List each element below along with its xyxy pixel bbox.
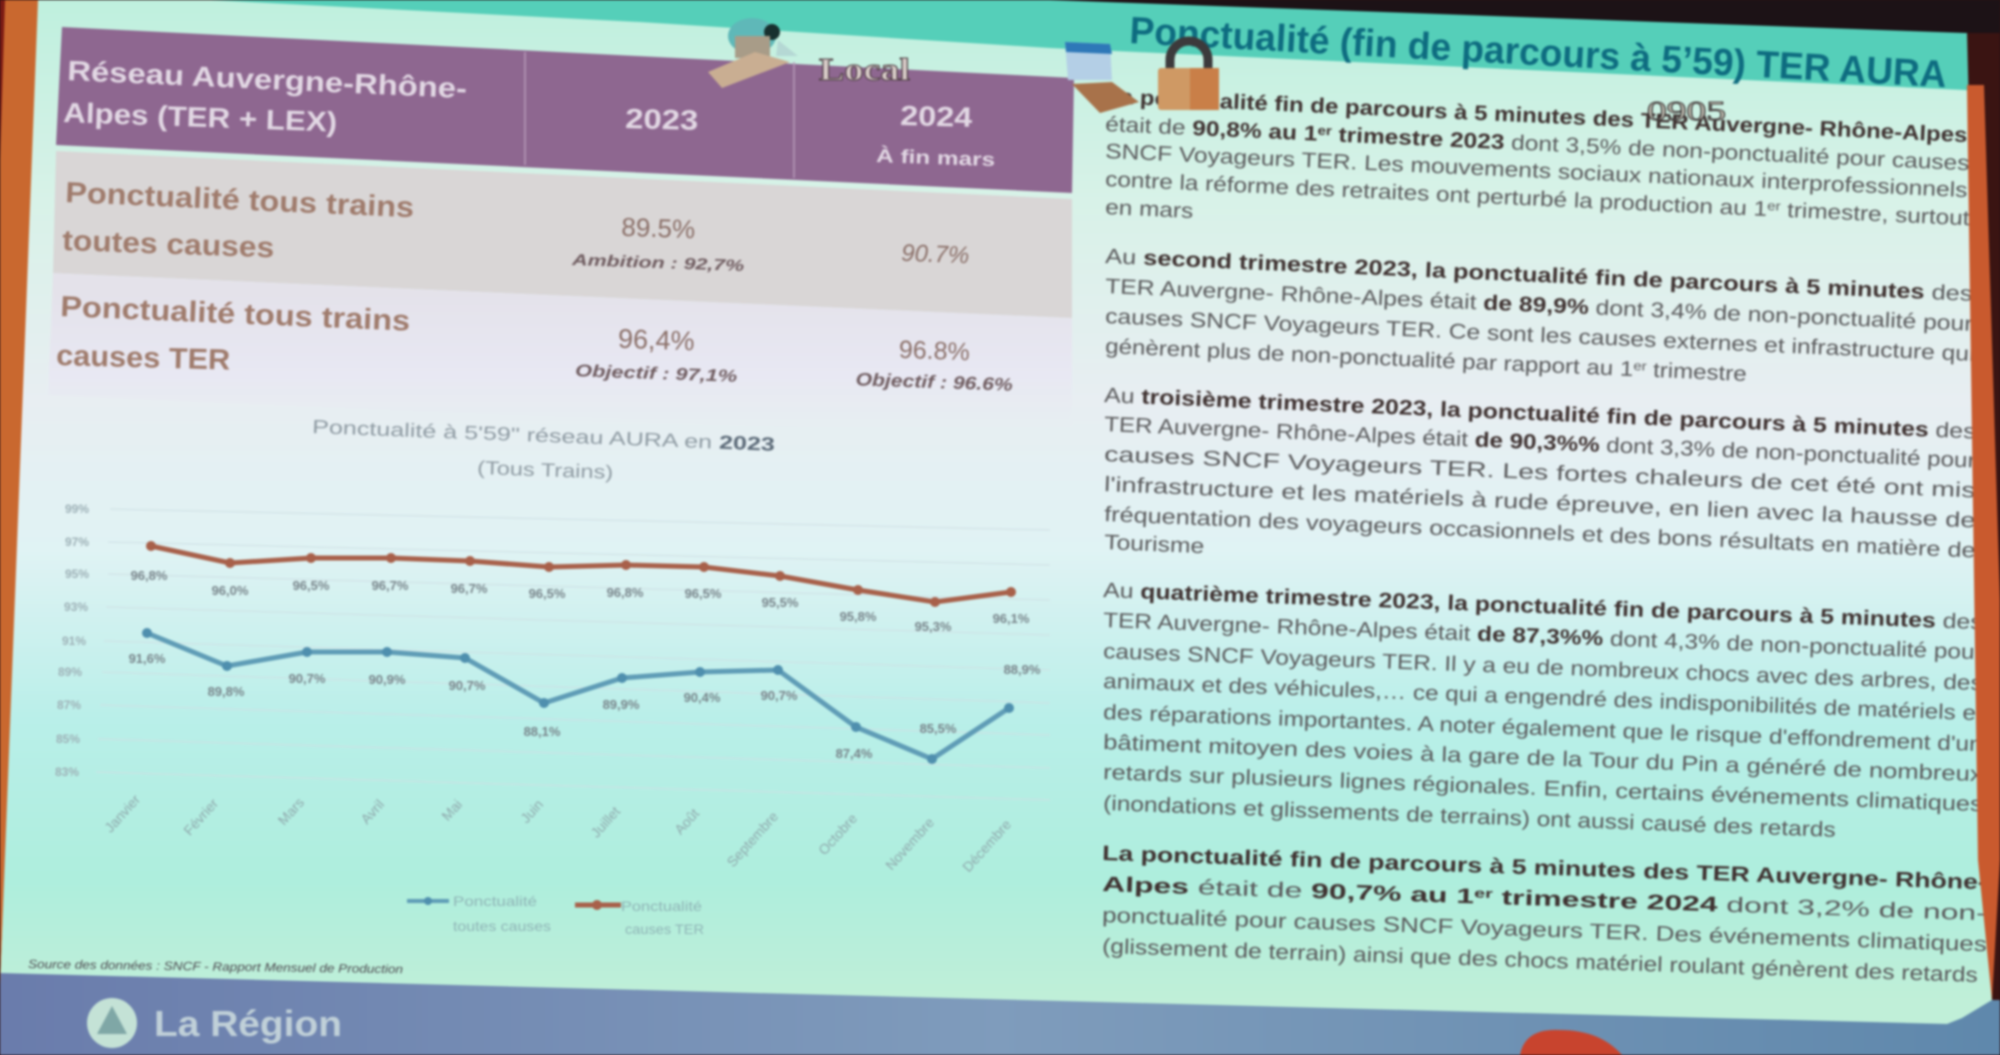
data labels: all causes: 91,6% [129,651,166,666]
icon: person overlay [708,18,798,88]
data labels: all causes: 89,9% [603,697,640,712]
month labels: Août [671,805,702,837]
chart title: (Tous Trains) [477,458,613,484]
text block: second quarter 2023: Au second trimestre 2023, la ponctualité fin de parcours à 5 minutes des [1105,245,1973,306]
data labels: all causes: 87,4% [836,746,873,761]
text block: fourth quarter 2023: bâtiment mitoyen des voies à la gare de la Tour du Pin a généré de nombreux [1103,731,1984,786]
chart title [312,417,775,484]
month labels: Octobre [815,810,860,858]
text block: first quarter 2024: La ponctualité fin de parcours à 5 minutes des TER Auvergne- Rhône- [1102,842,1987,894]
data labels: causes TER: 96,8% [131,568,168,583]
text block: first quarter 2023: était de 90,8% au 1 [1105,113,1300,145]
text block: first quarter 2023: SNCF Voyageurs TER. Les mouvements sociaux nationaux interprofessionnels [1105,140,1968,202]
text block: first quarter 2024: er [1474,885,1493,901]
data labels: causes TER: 95,5% [762,595,799,610]
footer red logo [1520,1030,1622,1055]
data labels: all causes: 90,7% [449,678,486,693]
values 2023: all causes: 89.5% [621,212,696,244]
table row: all causes [53,151,1072,318]
data labels: all causes: 89,8% [208,684,245,699]
values 2023: TER causes [575,324,737,386]
text block: first quarter 2023: La ponctualité fin de parcours à 5 minutes des TER Auvergne- Rhône-Alpes [1105,85,1968,147]
footer brand text: La Région [154,1003,342,1044]
data labels: causes TER: 96,7% [451,581,488,596]
text block: third quarter 2023 [1104,384,1976,563]
values 2024: TER causes: 96.8% [898,336,970,366]
table header background [56,27,1074,193]
text block: third quarter 2023: TER Auvergne- Rhône-Alpes était de 90,3%% dont 3,3% de non-ponctualité pour [1104,413,1976,473]
header label: Réseau Auvergne-Rhône- [67,55,468,104]
data labels: all causes: 88,9% [1004,662,1041,677]
text block: third quarter 2023: fréquentation des voyageurs occasionnels et des bons résultats en matière de [1104,503,1976,563]
text block: first quarter 2023: trimestre 2023 [1331,123,1505,154]
y axis labels: 91% [62,634,86,648]
text block: second quarter 2023: génèrent plus de non-ponctualité par rapport au 1 [1105,335,1567,378]
y axis labels: 87% [57,698,81,712]
month labels [101,791,1014,875]
teal title band [210,0,2000,95]
left orange frame [0,0,38,985]
chart: punctuality 2023 [55,417,1050,937]
month labels: Septembre [724,808,781,870]
icon: laptop overlay [1065,42,1139,113]
right orange frame [1967,33,2000,1000]
text block: fourth quarter 2023: retards sur plusieurs lignes régionales. Enfin, certains événements climatiques [1103,761,1983,816]
month labels: Juin [517,796,546,826]
row label: all causes: Ponctualité tous trains [65,177,415,224]
text block: fourth quarter 2023: Au quatrième trimestre 2023, la ponctualité fin de parcours à 5 minutes des [1103,579,1983,634]
header year 2024 [876,100,996,171]
text block: first quarter 2024 [1102,842,1987,987]
text overlay: Local: Local [819,51,910,87]
text block: first quarter 2024: trimestre 2024 [1492,886,1718,916]
y axis labels: 89% [58,665,82,679]
text block: first quarter 2024: (glissement de terrain) ainsi que des chocs matériel roulant génèrent des retards [1102,935,1978,987]
grid lines [96,509,1050,800]
y axis labels: 85% [56,732,80,746]
data labels: all causes: 90,7% [289,671,326,686]
footer logo [87,998,137,1048]
text block: first quarter 2023 [1105,85,1970,230]
header year 2024: 2024 [900,100,973,133]
text block: first quarter 2023: dont 3,5% de non-ponctualité pour causes [1510,131,1904,172]
y axis labels: 95% [65,567,89,581]
data labels: all causes: 90,4% [684,690,721,705]
month labels: Janvier [101,791,143,836]
text block: first quarter 2024: dont 3,2% de non- [1723,894,1895,922]
text block: fourth quarter 2023: animaux et des véhicules,… ce qui a engendré des indisponibilités de matériels et [1103,670,1983,725]
text block: first quarter 2024: Alpes était de 90,7% au 1 [1102,873,1419,906]
month labels: Décembre [959,816,1014,875]
top dark area [1050,0,2000,33]
row label: all causes [62,177,415,264]
month labels: Novembre [882,814,937,873]
text overlay: number: 0905 [1647,96,1726,126]
month labels: Février [180,795,221,838]
data labels: all causes [129,651,1041,761]
table row: TER causes [48,273,1072,440]
text block: first quarter 2023: contre la réforme des retraites ont perturbé la production au 1 [1105,168,1677,217]
text block: second quarter 2023: trimestre [1646,359,1747,386]
header label: Alpes (TER + LEX) [63,97,338,138]
text block: second quarter 2023: er [1633,358,1648,374]
header label [63,55,468,138]
row label: all causes: toutes causes [62,225,275,264]
y axis labels: 97% [65,535,89,549]
header year 2023: 2023 [625,103,699,136]
text block: third quarter 2023: l'infrastructure et les matériels à rude épreuve, en lien avec la hausse de [1104,473,1976,533]
legend: toutes causes [453,918,551,934]
legend: causes TER [625,921,704,937]
icon: padlock overlay [1158,41,1219,110]
month labels: Juillet [587,803,623,841]
text block: third quarter 2023: Au troisième trimestre 2023, la ponctualité fin de parcours à 5 minutes des [1104,384,1976,444]
text block: second quarter 2023 [1105,245,1975,386]
data labels: causes TER: 96,5% [685,586,722,601]
values 2024: TER causes: Objectif : 96.6% [855,369,1013,395]
text block: first quarter 2024: ponctualité pour causes SNCF Voyageurs TER. Des événements climatiques [1102,904,1987,956]
legend: Ponctualité [621,898,702,914]
values 2024: TER causes [855,336,1013,395]
text block: second quarter 2023: causes SNCF Voyageurs TER. Ce sont les causes externes et infrastructure qui [1105,305,1975,366]
values 2023: all causes: Ambition : 92,7% [571,252,744,275]
text block: fourth quarter 2023 [1103,579,1984,842]
text block: first quarter 2023: trimestre, surtout [1780,199,1970,230]
values 2023: TER causes: Objectif : 97,1% [575,361,737,386]
text block: first quarter 2023: en mars [1105,196,1194,223]
value 2024: all causes: 90.7% [901,240,970,269]
month labels: Avril [357,796,387,827]
panel title: Ponctualité (fin de parcours à 5’59) TER AURA [1129,10,1948,96]
y axis labels: 93% [64,600,88,614]
month labels: Mars [275,794,307,828]
data labels: causes TER: 96,0% [212,583,249,598]
row label: TER causes: Ponctualité tous trains [60,291,411,338]
y axis labels: 83% [55,765,79,779]
y axis labels [55,502,89,779]
line: causes TER [146,541,1016,607]
text block: fourth quarter 2023: des réparations importantes. A noter également que le risque d'effondrement d'un [1103,701,1983,756]
header year 2024: À fin mars [876,145,996,171]
data labels: causes TER: 96,5% [529,586,566,601]
data labels: all causes: 90,7% [761,688,798,703]
data labels: causes TER: 96,8% [607,585,644,600]
text block: second quarter 2023: TER Auvergne- Rhône-Alpes était de 89,9% dont 3,4% de non-ponctualité pour [1105,275,1973,336]
text block: first quarter 2023: er [1767,198,1782,214]
values 2023: all causes [571,212,744,275]
legend [407,893,704,937]
data labels: causes TER: 96,7% [372,578,409,593]
data labels: causes TER: 95,3% [915,619,952,634]
footer band [0,973,2000,1055]
data labels: causes TER [131,568,1030,634]
chart title: Ponctualité à 5'59" réseau AURA en 2023 [312,417,775,456]
data labels: all causes: 90,9% [369,672,406,687]
values 2023: TER causes: 96,4% [618,324,695,356]
text block: first quarter 2023: er [1317,123,1332,138]
text block: fourth quarter 2023: (inondations et glissements de terrains) ont aussi causé des retards [1103,792,1836,842]
column separators [525,52,794,178]
row label: TER causes [56,291,411,377]
legend: Ponctualité [453,893,537,909]
text block: third quarter 2023: Tourisme [1104,531,1205,558]
panel: punctuality table [48,27,1074,440]
data labels: all causes: 88,1% [524,724,561,739]
data labels: causes TER: 95,8% [840,609,877,624]
text block: third quarter 2023: causes SNCF Voyageurs TER. Les fortes chaleurs de cet été ont mis [1104,443,1976,503]
y axis labels: 99% [65,502,89,516]
text block: fourth quarter 2023: causes SNCF Voyageurs TER. Il y a eu de nombreux chocs avec des arbres, des [1103,640,1983,695]
data labels: causes TER: 96,5% [293,578,330,593]
text block: fourth quarter 2023: TER Auvergne- Rhône-Alpes était de 87,3%% dont 4,3% de non-ponctualité pour [1103,609,1983,664]
row label: TER causes: causes TER [56,340,231,377]
data labels: causes TER: 96,1% [993,611,1030,626]
month labels: Mai [438,796,465,824]
line: all causes [142,628,1014,764]
source note: Source des données : SNCF - Rapport Mensuel de Production [28,957,403,976]
data labels: all causes: 85,5% [920,721,957,736]
